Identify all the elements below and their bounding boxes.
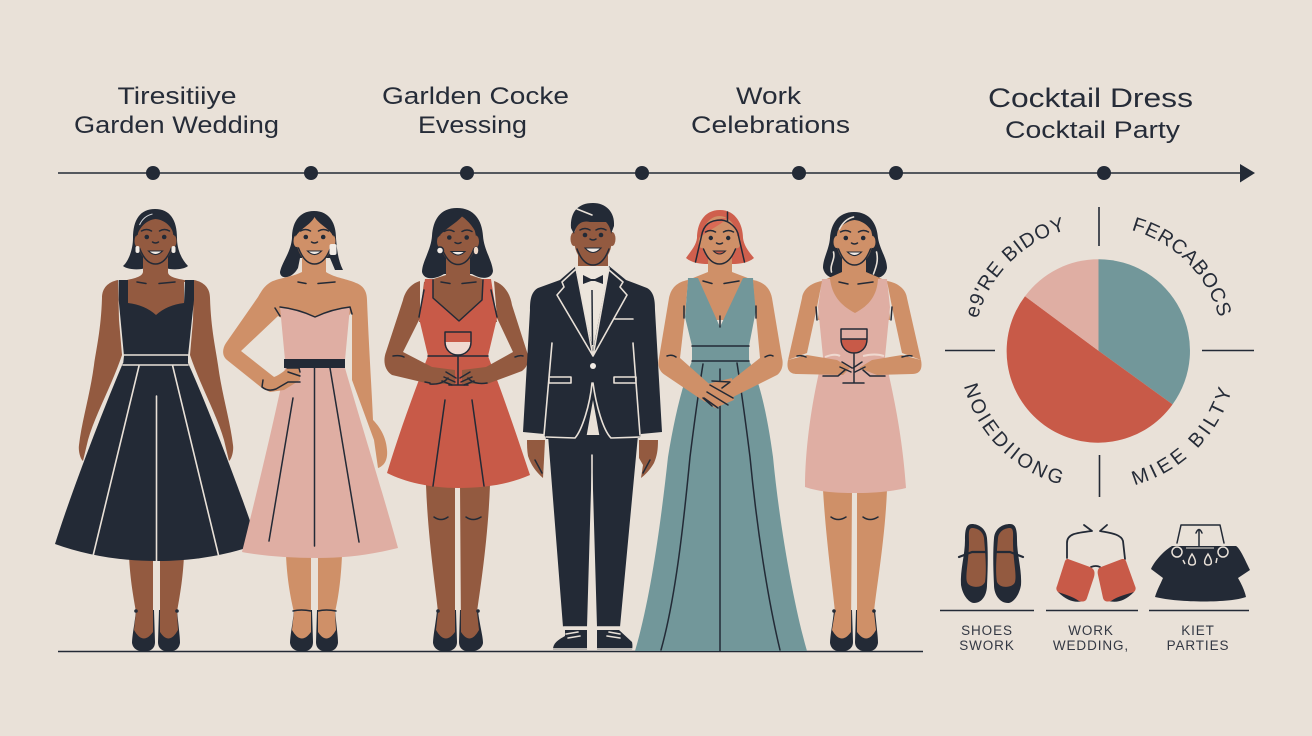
pie chart with curved labels [945, 207, 1254, 497]
heading: cocktail dress: Cocktail Dress [988, 83, 1193, 113]
heading: garden cocktail evening: Garlden Cocke [382, 83, 569, 110]
heading: work celebrations: Work [736, 83, 802, 110]
quadrant ticks [945, 207, 1254, 497]
heading: work celebrations [691, 83, 850, 139]
pie slices [1007, 259, 1190, 443]
timeline arrow with dots [58, 164, 1255, 182]
shirt [576, 266, 610, 350]
face [831, 213, 877, 274]
face [570, 203, 616, 265]
icon caption: shoes: SWORK [959, 638, 1015, 653]
ground line [58, 650, 923, 652]
figure: woman in blush dress [223, 211, 398, 652]
figure: woman in coral dress with wine glass [384, 208, 530, 652]
icon caption: work wedding [1046, 610, 1138, 653]
face [436, 212, 479, 264]
icon caption: parties: PARTIES [1167, 638, 1229, 653]
hands [527, 440, 658, 478]
heading: garden wedding: Garden Wedding [74, 112, 279, 139]
heading: cocktail dress: Cocktail Party [1005, 117, 1180, 144]
icon caption: shoes [940, 610, 1034, 653]
icon: navy party top [1151, 525, 1250, 602]
heading: garden wedding: Tiresitiiye [118, 83, 236, 110]
pink dress [805, 279, 906, 493]
face [134, 213, 176, 264]
icon caption: work wedding: WEDDING, [1053, 638, 1129, 653]
wine glass [445, 332, 471, 385]
figure: man in navy tuxedo [523, 203, 662, 650]
icon: coral bolero [1056, 525, 1136, 602]
dress shoes [553, 630, 632, 650]
arms [384, 281, 528, 385]
icon caption: parties: KIET [1181, 623, 1215, 638]
curved labels: NOIEDIIONG [964, 383, 1062, 483]
navy dress [55, 280, 258, 561]
icon caption: parties [1149, 610, 1249, 653]
heading: garden cocktail evening: Evessing [418, 112, 527, 139]
jacket [523, 266, 662, 439]
figure: woman in teal gown [635, 210, 807, 651]
neck [578, 255, 608, 272]
figure: woman in navy dress [55, 209, 258, 652]
heading: work celebrations: Celebrations [691, 112, 850, 139]
teal gown [635, 278, 807, 651]
curved labels: MIEE BILTY [1132, 386, 1230, 485]
coral dress [387, 279, 530, 488]
icon: shoes [959, 524, 1023, 603]
icon caption: work wedding: WORK [1068, 623, 1114, 638]
arms and hands [658, 280, 783, 408]
heading: garden wedding [74, 83, 279, 139]
curved labels [964, 217, 1231, 485]
curved labels: FERCABOCS [1132, 217, 1231, 316]
curved labels: e9'RE BIDOY [968, 217, 1061, 317]
hand on hip [262, 368, 300, 392]
trousers [548, 435, 638, 628]
icon caption: shoes: SHOES [961, 623, 1013, 638]
blush dress [242, 307, 398, 558]
arms [787, 281, 922, 376]
heading: cocktail dress [988, 83, 1193, 144]
face [294, 213, 336, 264]
face [696, 212, 744, 264]
heading: garden cocktail evening [382, 83, 569, 139]
figure: woman in pink dress with wine glass [787, 212, 922, 652]
wine glass [841, 329, 867, 383]
